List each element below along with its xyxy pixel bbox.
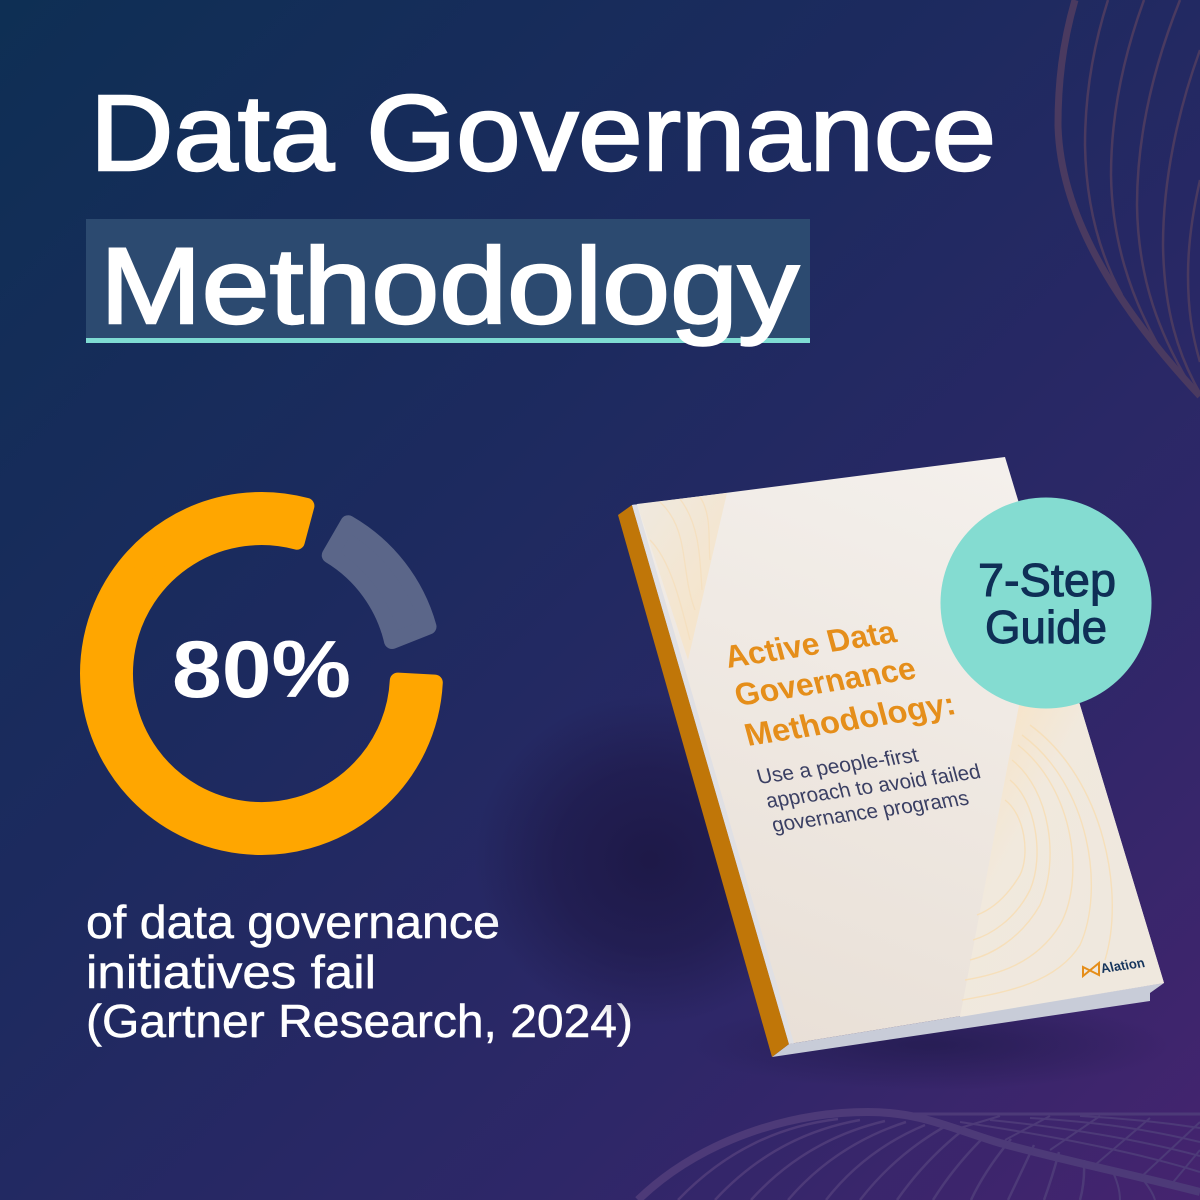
title line: Data Governance: Data Governance [90, 72, 996, 193]
badge: 7-Step Guide: Guide [985, 601, 1107, 653]
book subtitle: approach to avoid failed [763, 760, 983, 813]
book shadow [475, 695, 1170, 1090]
donut chart: 80 percent [88, 500, 435, 847]
book: guide cover [618, 457, 1164, 1057]
statistic caption: of data governance [86, 896, 500, 948]
book subtitle: governance programs [769, 787, 971, 837]
book subtitle [754, 744, 983, 837]
book title [720, 614, 959, 753]
cover pattern bottom right [960, 700, 1164, 1017]
badge: 7-Step Guide: 7-Step [978, 554, 1116, 606]
statistic caption: (Gartner Research, 2024) [86, 995, 633, 1047]
book spine [618, 505, 789, 1057]
cover pattern top left [637, 493, 727, 660]
title highlight: Methodology: Methodology [100, 225, 799, 346]
book subtitle: Use a people-first [754, 744, 921, 789]
book title: Active Data [720, 614, 900, 675]
donut segment: fail 80% [88, 500, 435, 847]
book title: Governance [730, 650, 920, 713]
statistic caption: initiatives fail [86, 946, 376, 998]
book title: Methodology: [740, 686, 959, 753]
decorative curves top right [1058, 0, 1200, 396]
badge: 7-Step Guide [940, 498, 1152, 708]
donut segment: remaining 20% [330, 523, 428, 641]
donut value: 80% [172, 625, 351, 715]
decorative curves bottom right [638, 1112, 1200, 1200]
book pages edge [772, 983, 1164, 1057]
Alation logo: Alation [1099, 955, 1146, 976]
statistic caption [86, 896, 633, 1047]
book front cover [632, 457, 1164, 1044]
